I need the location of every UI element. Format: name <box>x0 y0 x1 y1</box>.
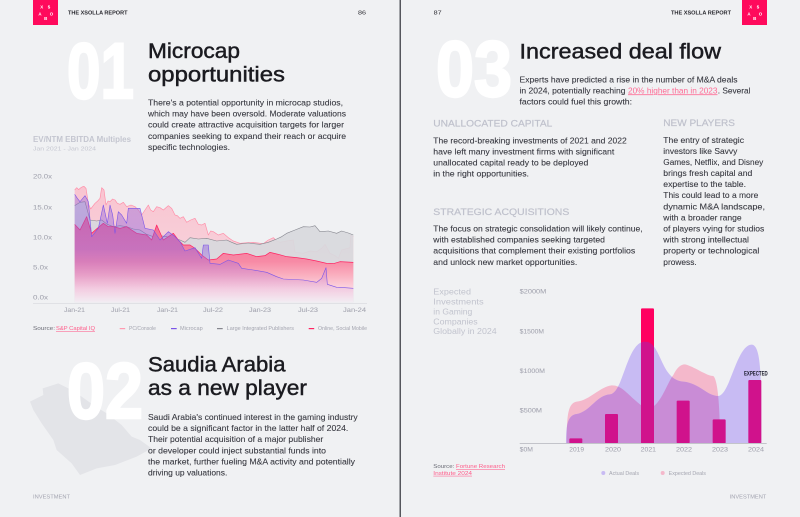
block: Unallocated capital: The record-breaking investments of 2021 and 2022 <box>433 136 627 145</box>
x axis labels <box>569 446 765 453</box>
section 02 <box>30 346 359 477</box>
series: Large Integrated Publishers <box>75 202 353 302</box>
block: New players: NEW PLAYERS <box>663 118 735 129</box>
area: actual deals <box>566 342 761 443</box>
y axis labels <box>33 174 53 302</box>
chart title: expected investments: Investments <box>433 298 484 307</box>
block: New players: expertise to the table. <box>663 180 746 189</box>
heading: Increased deal flow: Increased deal flow <box>520 40 722 63</box>
block: Strategic acquisitions: with established companies seeking targeted <box>432 236 605 245</box>
chart source <box>433 464 505 477</box>
block: Unallocated capital <box>433 119 627 179</box>
bars <box>569 308 761 443</box>
logo right <box>742 0 767 25</box>
chart title: expected investments: Globally in 2024 <box>433 327 497 336</box>
intro text: factors could fuel this growth: <box>520 97 632 106</box>
section 03 <box>432 24 765 267</box>
logo right: X <box>749 4 752 10</box>
logo right: A <box>747 12 751 16</box>
x axis labels: 2022 <box>676 446 693 453</box>
page number 87: 87 <box>434 10 442 16</box>
block: Strategic acquisitions: acquisitions that complement their existing portfolios <box>433 247 635 256</box>
left page <box>30 0 367 501</box>
logo right: B <box>753 16 756 21</box>
x axis labels: 2023 <box>712 446 729 453</box>
logo left <box>33 0 58 25</box>
body text 01: which may have been oversold. Moderate valuations <box>147 110 346 119</box>
section 01 <box>67 26 346 152</box>
block: Strategic acquisitions: STRATEGIC ACQUISITIONS <box>433 207 569 218</box>
x axis labels: Jul-22 <box>203 307 224 314</box>
footer left: INVESTMENT <box>33 495 71 501</box>
logo left: A <box>38 12 42 16</box>
x axis labels: Jan-23 <box>249 307 272 314</box>
body text 01 <box>147 98 346 152</box>
block: New players: brings fresh capital and <box>663 169 753 178</box>
y axis labels: 5.0x <box>33 265 49 272</box>
y axis labels: $1500M <box>520 328 544 335</box>
block: New players: investors like Savvy <box>663 147 738 156</box>
series: Online, Social Mobile <box>75 217 353 302</box>
intro text <box>520 76 751 106</box>
y axis labels: 15.0x <box>33 204 53 211</box>
chart legend: Online, Social Mobile <box>318 326 367 332</box>
x axis labels <box>64 307 367 314</box>
bar and area chart: investments <box>520 289 768 477</box>
chart legend: Large Integrated Publishers <box>227 326 295 332</box>
intro text: Experts have predicted a rise in the number of M&A deals <box>520 76 738 84</box>
heading: Saudia Arabia as a new player <box>148 354 307 400</box>
y axis labels: 20.0x <box>33 174 53 180</box>
logo left: X <box>40 4 43 10</box>
chart source: Source: <box>433 464 454 470</box>
chart title: expected investments: Companies <box>433 317 478 326</box>
chart legend <box>601 471 707 477</box>
right page <box>432 0 768 500</box>
x axis labels: Jul-23 <box>298 307 319 314</box>
logo left: O <box>50 12 54 16</box>
body text 02: Their potential acquisition of a major publisher <box>148 435 324 444</box>
chart source: Fortune Research <box>456 464 505 470</box>
x axis labels: 2020 <box>605 446 622 453</box>
chart title: expected investments: in Gaming <box>433 308 472 317</box>
logo right: $ <box>757 4 760 10</box>
chart title: expected investments <box>433 288 497 336</box>
y axis labels: $0M <box>520 447 533 454</box>
page number 86: 86 <box>358 10 366 16</box>
icon: Saudi Arabia map silhouette <box>30 383 152 475</box>
x axis labels: 2024 <box>748 446 765 453</box>
area: overlap of actual and expected <box>566 377 720 443</box>
block: Strategic acquisitions <box>432 207 643 267</box>
body text 01: could create attractive acquisition targets for larger <box>148 121 344 130</box>
series: PC/Console <box>75 186 353 302</box>
x axis labels: 2019 <box>569 446 585 453</box>
series: Microcap <box>75 194 353 302</box>
chart source: S&P Capital IQ <box>56 326 95 332</box>
block: New players: This could lead to a more <box>663 191 759 200</box>
chart legend: Actual Deals <box>609 471 640 477</box>
body text 02: could be a significant factor in the latter half of 2024. <box>148 424 348 433</box>
y axis labels: $500M <box>520 407 542 414</box>
block: New players: dynamic M&A landscape, <box>663 202 765 211</box>
chart title: expected investments: Expected <box>433 288 471 297</box>
block: Unallocated capital: in the right opportunities. <box>433 170 529 179</box>
block: New players: property or technological <box>663 247 759 256</box>
numeral 03: 03 <box>436 24 512 113</box>
y axis labels <box>520 289 546 454</box>
chart source <box>33 326 95 332</box>
block: Unallocated capital: have left many investment firms with significant <box>433 147 615 156</box>
numeral 01: 01 <box>67 26 134 115</box>
logo left: B <box>44 16 47 21</box>
x axis labels: Jan-21 <box>157 307 179 314</box>
intro text: . Several <box>718 86 751 95</box>
numeral 02: 02 <box>67 346 143 435</box>
body text 01: companies seeking to expand their reach or acquire <box>148 132 346 141</box>
body text 02: or developer could inject substantial funds into <box>148 446 326 455</box>
x axis labels: Jan-24 <box>343 307 367 314</box>
footer right: INVESTMENT <box>730 494 767 500</box>
chart source: Source: <box>33 326 55 332</box>
page divider <box>400 0 401 517</box>
chart title: Jan 2021 - Jan 2024 <box>33 146 96 152</box>
block: New players <box>662 118 765 267</box>
chart legend: PC/Console <box>129 326 156 332</box>
block: New players: The entry of strategic <box>663 136 744 145</box>
body text 02: Saudi Arabia's continued interest in the gaming industry <box>148 413 359 422</box>
body text 01: There's a potential opportunity in microcap studios, <box>148 98 343 108</box>
chart title: EV/NTM EBITDA Multiples <box>33 134 131 144</box>
block: New players: prowess. <box>663 258 697 267</box>
area: expected deals <box>567 364 720 443</box>
body text 02: the market, further fueling M&A activity and potentially <box>148 457 356 466</box>
x axis labels: Jan-21 <box>64 307 86 314</box>
block: Unallocated capital: UNALLOCATED CAPITAL <box>433 119 553 130</box>
y axis labels: 10.0x <box>33 234 53 241</box>
logo left: $ <box>48 4 51 10</box>
block: Strategic acquisitions: The focus on strategic consolidation will likely continue, <box>433 225 643 234</box>
x axis labels: 2021 <box>641 446 657 453</box>
plot <box>566 308 761 443</box>
y axis labels: $2000M <box>520 289 546 296</box>
plotted series <box>75 186 353 302</box>
heading: Saudia Arabia as a new player: Saudia Arabia <box>148 354 286 377</box>
heading: Microcap opportunities: opportunities <box>148 64 285 86</box>
y axis labels: 0.0x <box>33 295 49 302</box>
heading: Microcap opportunities: Microcap <box>148 40 240 63</box>
y axis labels: $1000M <box>520 368 545 375</box>
expected label: EXPECTED <box>744 371 768 377</box>
x axis labels: Jul-21 <box>111 307 131 314</box>
chart legend: Expected Deals <box>669 471 707 477</box>
chart title <box>33 134 131 152</box>
block: New players: Games, Netflix, and Disney <box>663 158 764 167</box>
body text 02 <box>148 413 359 477</box>
heading: Saudia Arabia as a new player: as a new player <box>148 377 307 400</box>
intro text: 20% higher than in 2023 <box>628 86 718 95</box>
block: Unallocated capital: unallocated capital ready to be deployed <box>433 158 589 167</box>
running header right: THE XSOLLA REPORT <box>671 10 732 16</box>
chart legend <box>120 326 367 332</box>
body text 02: driving up valuations. <box>148 468 227 477</box>
block: New players: with strong intellectual <box>662 235 749 244</box>
line chart: EV/NTM EBITDA multiples <box>33 174 367 332</box>
logo right: O <box>759 12 763 16</box>
heading: Microcap opportunities <box>148 40 285 86</box>
body text 01: specific technologies. <box>148 143 230 152</box>
chart legend: Microcap <box>180 326 203 332</box>
block: New players: with a broader range <box>662 213 742 222</box>
running header left: THE XSOLLA REPORT <box>68 10 128 16</box>
chart source: Institute 2024 <box>433 471 472 477</box>
block: Strategic acquisitions: and unlock new market opportunities. <box>433 258 577 267</box>
block: New players: of players vying for studios <box>663 224 764 233</box>
intro text: in 2024, potentially reaching <box>520 86 626 95</box>
